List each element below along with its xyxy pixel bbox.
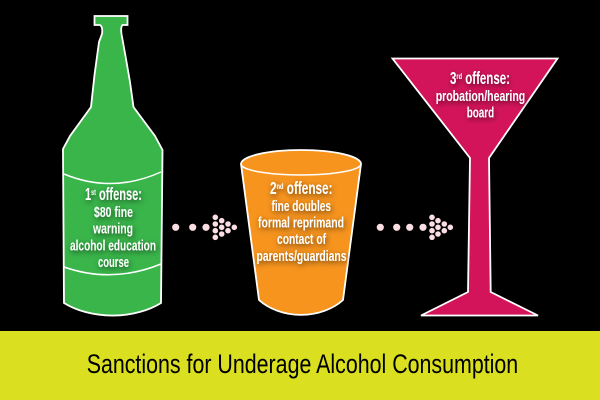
second offense text: 2 (270, 178, 280, 198)
cup: second offense (241, 150, 361, 315)
arrow: second to third offense (377, 214, 453, 240)
martini glass: third offense (392, 58, 558, 316)
first offense text: warning (92, 222, 133, 238)
arrow: first to second offense (172, 214, 237, 240)
third offense text (436, 68, 525, 122)
second offense text: fine doubles (272, 199, 331, 215)
second offense text: nd (277, 181, 284, 191)
title banner (0, 331, 600, 400)
first offense text: 1 (85, 184, 95, 204)
third offense text: 3 (450, 68, 460, 88)
glass shape (392, 58, 558, 316)
cup rim line (241, 164, 361, 175)
second offense text: offense: (284, 178, 332, 198)
bottle: first offense (63, 16, 162, 316)
second offense text: contact of (277, 232, 326, 248)
second offense text (256, 178, 346, 265)
third offense text: probation/hearing (436, 89, 525, 105)
bottle shape (63, 16, 162, 316)
first offense text: $80 fine (94, 205, 133, 221)
third offense text: offense: (462, 68, 510, 88)
first offense text: st (91, 187, 96, 197)
third offense text: rd (456, 71, 462, 81)
cup shape (241, 150, 361, 315)
third offense text: board (467, 106, 494, 122)
first offense text: offense: (96, 184, 142, 204)
second offense text: formal reprimand (258, 216, 344, 232)
second offense text: parents/guardians (256, 249, 346, 265)
first offense text: alcohol education (70, 238, 156, 254)
first offense text (70, 184, 156, 271)
label lines (64, 172, 161, 275)
first offense text: course (98, 255, 129, 271)
